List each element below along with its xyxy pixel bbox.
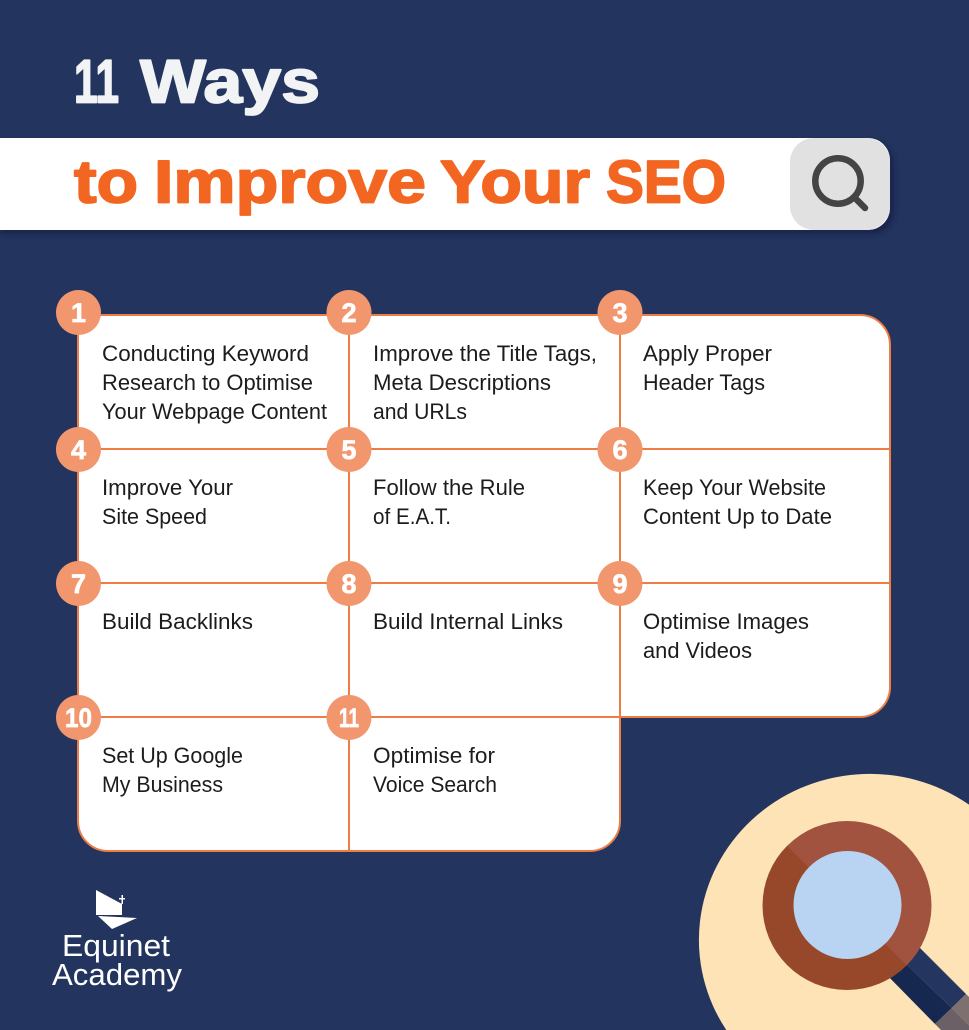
title: to Improve Your SEO: Improve bbox=[154, 148, 426, 216]
item 3: Header Tags bbox=[643, 370, 765, 395]
icon: search bbox=[815, 158, 865, 208]
item 5: Follow the Rule bbox=[373, 475, 525, 500]
item 11: Voice Search bbox=[373, 772, 497, 797]
item 9: Optimise Images bbox=[643, 609, 809, 634]
title: to Improve Your SEO bbox=[74, 148, 726, 216]
item 5: of E.A.T. bbox=[373, 504, 451, 529]
item 8 bbox=[326, 561, 563, 634]
item 4 bbox=[56, 427, 233, 529]
item 1 bbox=[56, 290, 328, 424]
item 1: Research to Optimise bbox=[102, 370, 313, 395]
title: to Improve Your SEO: Your bbox=[440, 148, 590, 216]
item 4: Improve Your bbox=[102, 475, 233, 500]
item 1: 1 bbox=[71, 298, 86, 328]
item 10: My Business bbox=[102, 772, 223, 797]
item 11 bbox=[326, 695, 497, 797]
item 11: 11 bbox=[339, 703, 359, 733]
logo: Equinet Academy bbox=[52, 890, 182, 992]
logo: Equinet Academy: Academy bbox=[52, 957, 182, 992]
cream circle bbox=[699, 774, 969, 1030]
icon: logo mark bbox=[96, 890, 137, 929]
item 4: Site Speed bbox=[102, 504, 207, 529]
item 2 bbox=[326, 290, 597, 424]
item 10 bbox=[56, 695, 243, 797]
item 10: 10 bbox=[65, 703, 92, 733]
grid card background bbox=[78, 315, 890, 851]
item 7: 7 bbox=[71, 569, 86, 599]
title: 11 Ways: 11 bbox=[74, 48, 119, 116]
item 6: Keep Your Website bbox=[643, 475, 826, 500]
item 9: 9 bbox=[612, 569, 628, 599]
search bar bbox=[0, 138, 894, 234]
item 2: Improve the Title Tags, bbox=[373, 341, 597, 366]
item 8: Build Internal Links bbox=[373, 609, 563, 634]
logo: Equinet Academy: Equinet bbox=[62, 928, 170, 963]
item 6 bbox=[598, 427, 832, 529]
item 4: 4 bbox=[71, 435, 86, 465]
item 3 bbox=[598, 290, 772, 395]
item 1: Your Webpage Content bbox=[102, 399, 328, 424]
title: to Improve Your SEO: to bbox=[74, 148, 138, 216]
item 3: Apply Proper bbox=[643, 341, 772, 366]
item 7: Build Backlinks bbox=[102, 609, 253, 634]
item 2: 2 bbox=[341, 298, 357, 328]
search button bbox=[790, 138, 890, 230]
item 6: Content Up to Date bbox=[643, 504, 832, 529]
magnifier handle bbox=[885, 943, 969, 1030]
item 11: Optimise for bbox=[373, 743, 496, 768]
item 8: 8 bbox=[341, 569, 357, 599]
item 7 bbox=[56, 561, 253, 634]
item 9 bbox=[598, 561, 809, 663]
illustration: magnifying glass bbox=[699, 774, 969, 1030]
item 6: 6 bbox=[612, 435, 628, 465]
item 1: Conducting Keyword bbox=[102, 341, 309, 366]
magnifier ring bbox=[762, 821, 932, 990]
title: 11 Ways bbox=[74, 48, 320, 116]
item 10: Set Up Google bbox=[102, 743, 243, 768]
item 5 bbox=[326, 427, 525, 529]
item 3: 3 bbox=[612, 298, 628, 328]
magnifier lens bbox=[794, 851, 902, 959]
title: 11 Ways: Ways bbox=[140, 48, 320, 116]
panel: grid of 11 ways bbox=[56, 290, 890, 851]
title: to Improve Your SEO: SEO bbox=[606, 148, 726, 216]
item 2: and URLs bbox=[373, 399, 467, 424]
item 5: 5 bbox=[341, 435, 357, 465]
item 2: Meta Descriptions bbox=[373, 370, 551, 395]
item 9: and Videos bbox=[643, 638, 752, 663]
